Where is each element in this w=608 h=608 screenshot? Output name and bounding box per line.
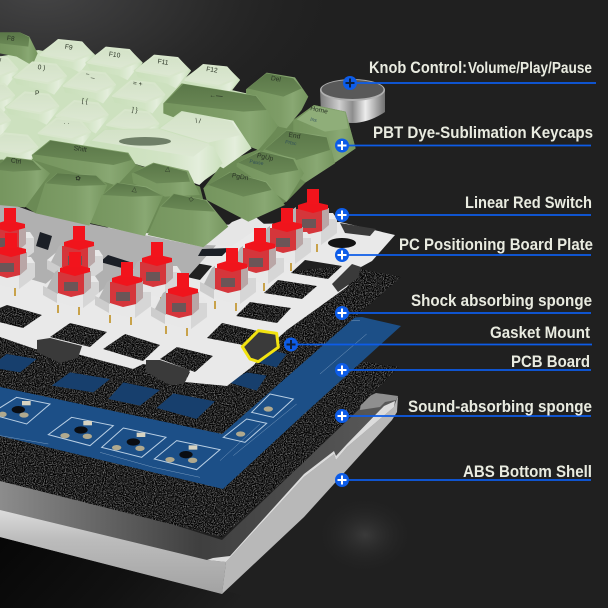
key backslash bbox=[158, 111, 252, 168]
letter row keys: [ { bbox=[81, 98, 89, 106]
number row keys: − _ bbox=[85, 71, 96, 79]
key shift: Shift bbox=[73, 145, 87, 154]
key pgup: Pause bbox=[249, 159, 264, 167]
gasket mount highlight bbox=[242, 331, 278, 362]
function row keys: F9 bbox=[64, 44, 73, 52]
callout: shell bbox=[335, 463, 592, 487]
shell right wall bbox=[222, 396, 398, 594]
key pgdn: PgDn bbox=[231, 172, 249, 182]
function row keys bbox=[38, 40, 239, 98]
key home bbox=[293, 105, 356, 163]
key end: End bbox=[288, 132, 301, 141]
label: Linear Red Switch bbox=[465, 194, 592, 212]
key pgup bbox=[237, 151, 304, 202]
linear red switches bbox=[0, 189, 337, 336]
ABS bottom shell bbox=[0, 393, 398, 594]
label: Sound-absorbing sponge bbox=[408, 398, 592, 416]
dark gaps between switches bbox=[36, 232, 230, 268]
label: PCB Board bbox=[511, 353, 590, 371]
function row keys: F12 bbox=[206, 66, 218, 75]
key F8 bbox=[0, 32, 38, 66]
left partial light keys bbox=[0, 56, 40, 167]
callout: switch bbox=[335, 194, 592, 222]
callout: pcb bbox=[335, 353, 591, 377]
number row keys: = + bbox=[132, 80, 143, 88]
callout: keycaps bbox=[335, 124, 593, 152]
key fn left bbox=[36, 173, 107, 226]
key shift bbox=[32, 140, 136, 186]
switch housings backdrop bbox=[0, 200, 228, 300]
key backslash: \ / bbox=[195, 118, 201, 125]
label: Knob Control: bbox=[369, 59, 467, 77]
key fn arrow: △ bbox=[165, 166, 172, 173]
key backspace: ←— bbox=[209, 92, 223, 100]
sound-absorbing sponge bbox=[0, 362, 399, 537]
key end bbox=[263, 130, 335, 182]
pcb key footprints bbox=[0, 321, 367, 477]
label: PBT Dye-Sublimation Keycaps bbox=[373, 124, 593, 142]
key ctrl bbox=[0, 157, 50, 207]
key F8: F8 bbox=[6, 35, 15, 43]
label: Gasket Mount bbox=[490, 324, 590, 342]
callout: gasket bbox=[284, 324, 592, 352]
white rear stems and plate strip bbox=[205, 214, 264, 246]
letter row keys bbox=[5, 90, 161, 152]
plate gaskets bbox=[37, 223, 376, 385]
function row keys: F10 bbox=[108, 51, 121, 60]
key del bbox=[246, 73, 308, 128]
key home: Ins bbox=[310, 117, 318, 124]
PC positioning board plate bbox=[0, 222, 395, 386]
key well backing bbox=[0, 50, 356, 233]
callout: sound sponge bbox=[335, 398, 592, 423]
keycaps bbox=[0, 32, 356, 247]
plate screw hole bbox=[328, 238, 356, 248]
key fn middle: △ bbox=[131, 186, 138, 194]
key fn left: ✿ bbox=[75, 175, 82, 183]
letter row keys: · · bbox=[63, 120, 70, 127]
key ctrl: Ctrl bbox=[10, 157, 22, 166]
function row keys: F11 bbox=[157, 58, 169, 67]
key pgup: PgUp bbox=[256, 152, 274, 163]
letter row keys: P bbox=[35, 90, 40, 97]
number row keys bbox=[13, 62, 167, 114]
key enter bbox=[89, 128, 223, 185]
key home: Home bbox=[310, 105, 329, 116]
PCB board bbox=[0, 317, 401, 489]
letter row keys: ] } bbox=[131, 107, 139, 115]
label: ABS Bottom Shell bbox=[463, 463, 592, 481]
pcb holes and pads bbox=[0, 401, 273, 463]
key end: Prtsc bbox=[285, 139, 297, 147]
label: PC Positioning Board Plate bbox=[399, 236, 593, 254]
callout: shock sponge bbox=[335, 292, 592, 320]
key fn right: ◇ bbox=[188, 196, 195, 203]
knob bbox=[320, 79, 385, 123]
callout: knob control bbox=[343, 59, 596, 90]
key fn middle bbox=[91, 182, 163, 236]
number row keys: 0 ) bbox=[37, 64, 46, 72]
key del: Del bbox=[270, 75, 282, 84]
label: Shock absorbing sponge bbox=[411, 292, 592, 310]
shock absorbing sponge bbox=[0, 266, 401, 434]
key pgdn bbox=[203, 172, 285, 222]
key backspace bbox=[163, 83, 278, 150]
key fn arrow bbox=[132, 163, 200, 197]
sponge windows showing pcb bbox=[0, 351, 287, 419]
label: Volume/Play/Pause bbox=[468, 60, 592, 77]
key fn right bbox=[148, 193, 228, 247]
shell front wall bbox=[0, 510, 226, 594]
callout: plate bbox=[335, 236, 593, 262]
